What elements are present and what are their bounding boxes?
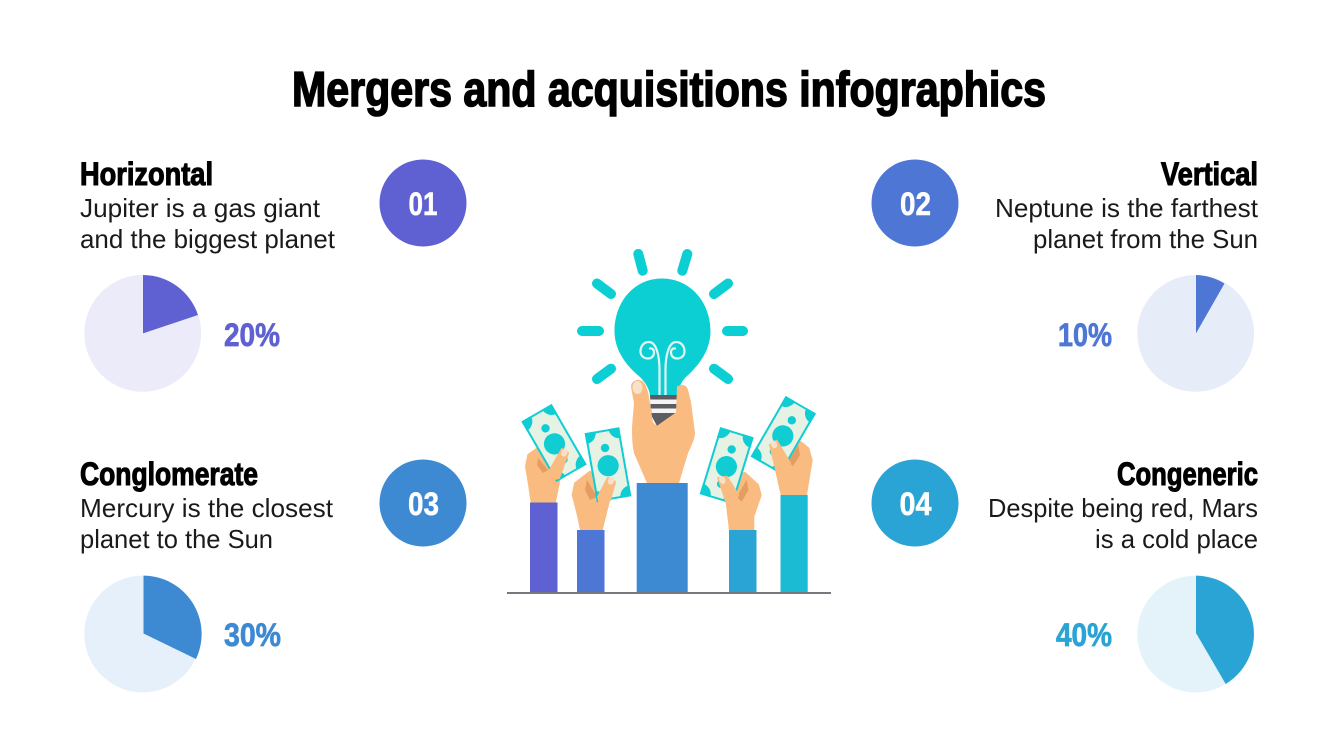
icon: hand holding bill 3: [686, 413, 767, 530]
icon: light bulb: [614, 278, 710, 426]
panel: conglomerate: [80, 456, 334, 692]
badge: 03: 03: [408, 486, 439, 522]
badge: 02: [872, 160, 958, 246]
badge: 04: 04: [900, 486, 932, 522]
badge: 01: 01: [408, 186, 438, 222]
icon: light rays: [582, 254, 743, 379]
pie chart: 10%: [1137, 275, 1254, 392]
heading: conglomerate: Conglomerate: [80, 456, 258, 492]
text block: congeneric description: [988, 493, 1258, 554]
ground line: [507, 592, 831, 594]
panel: horizontal: [80, 156, 336, 392]
icon: hand holding bill 4: [736, 381, 831, 495]
text block: conglomerate description: planet to the Sun: [80, 524, 273, 554]
text block: conglomerate description: Mercury is the closest: [80, 493, 334, 523]
heading: vertical: Vertical: [1161, 156, 1258, 192]
text block: vertical description: [995, 193, 1259, 254]
pie chart: 40%: [1137, 576, 1254, 692]
pie chart: 20%: [84, 275, 201, 392]
panel: congeneric: [988, 456, 1258, 692]
value: 30%: 30%: [224, 617, 281, 653]
text block: congeneric description: Despite being red, Mars: [988, 493, 1258, 523]
value: 10%: 10%: [1058, 317, 1112, 353]
illustration: hands with light bulb and money: [506, 254, 831, 594]
badge: 01: [380, 160, 466, 246]
text block: vertical description: Neptune is the farthest: [995, 193, 1259, 223]
panel: vertical: [995, 156, 1259, 392]
heading: congeneric: Congeneric: [1117, 456, 1258, 492]
badge: 02: 02: [900, 186, 931, 222]
heading: horizontal: Horizontal: [80, 156, 213, 192]
value: 20%: 20%: [224, 317, 280, 353]
text block: horizontal description: and the biggest planet: [80, 224, 336, 254]
badge: 04: [872, 460, 958, 546]
badge: 03: [380, 460, 466, 546]
text block: horizontal description: [80, 193, 336, 254]
pie chart: 30%: [84, 576, 202, 692]
text block: horizontal description: Jupiter is a gas giant: [80, 193, 321, 223]
icon: hand holding bill 1: [506, 389, 602, 502]
value: 40%: 40%: [1056, 617, 1112, 653]
title: Mergers and acquisitions infographics: [292, 63, 1046, 117]
icon: sleeves: [530, 483, 808, 592]
icon: hand holding bill 2: [572, 414, 644, 530]
text block: congeneric description: is a cold place: [1095, 524, 1258, 554]
text block: vertical description: planet from the Sun: [1033, 224, 1258, 254]
text block: conglomerate description: [80, 493, 334, 554]
icon: center hand: [632, 381, 694, 483]
